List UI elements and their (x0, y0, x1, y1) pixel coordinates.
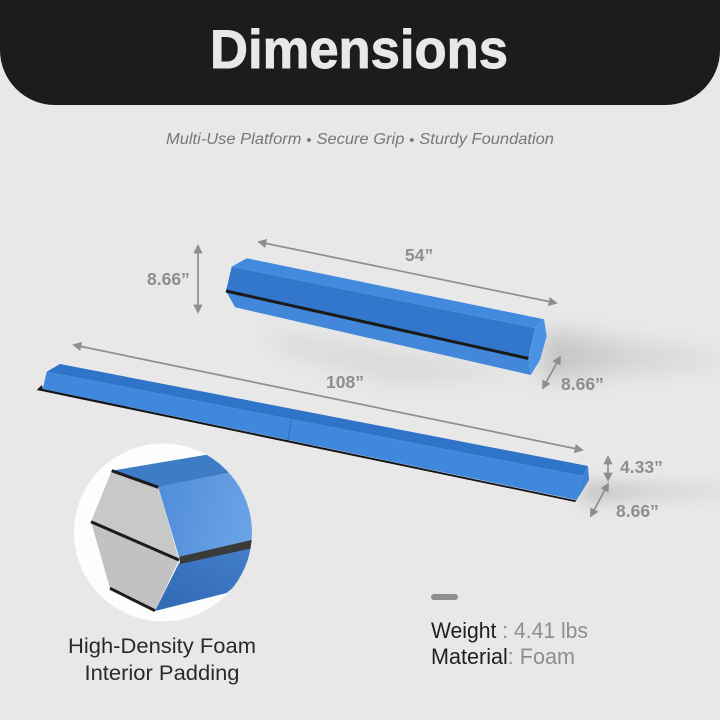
specs: Material: Foam (431, 644, 575, 669)
subtitle: ● (306, 134, 312, 144)
label: 108: 108” (326, 372, 364, 392)
caption: foam padding: Interior Padding (84, 662, 240, 685)
specs (431, 618, 588, 669)
specs: Weight : 4.41 lbs (431, 618, 588, 643)
label: 8.66 height: 8.66” (147, 269, 190, 289)
arrow: short beam depth (543, 357, 560, 388)
subtitle: ● (409, 134, 415, 144)
accent dash (431, 594, 458, 600)
arrow: short beam height (197, 246, 199, 312)
label: 4.33: 4.33” (620, 457, 663, 477)
subtitle: Multi-Use Platform (166, 131, 293, 148)
label: 54: 54” (405, 245, 433, 265)
subtitle: Secure Grip (312, 131, 409, 148)
arrow: 108 inch (74, 345, 582, 450)
caption: foam padding: High-Density Foam (68, 635, 256, 658)
background shadows (260, 330, 720, 503)
arrow: 54 inch (259, 242, 556, 303)
label: 8.66 long depth: 8.66” (616, 501, 659, 521)
title: Dimensions (210, 18, 508, 80)
arrow: long beam depth (591, 484, 608, 516)
long beam (37, 364, 589, 502)
header banner (0, 0, 720, 105)
short beam (226, 258, 547, 375)
arrow: long beam height (607, 457, 609, 480)
label: 8.66 depth: 8.66” (561, 374, 604, 394)
inset circle: foam interior (74, 444, 262, 622)
subtitle: Sturdy Foundation (415, 131, 554, 148)
caption: foam padding (68, 635, 256, 685)
